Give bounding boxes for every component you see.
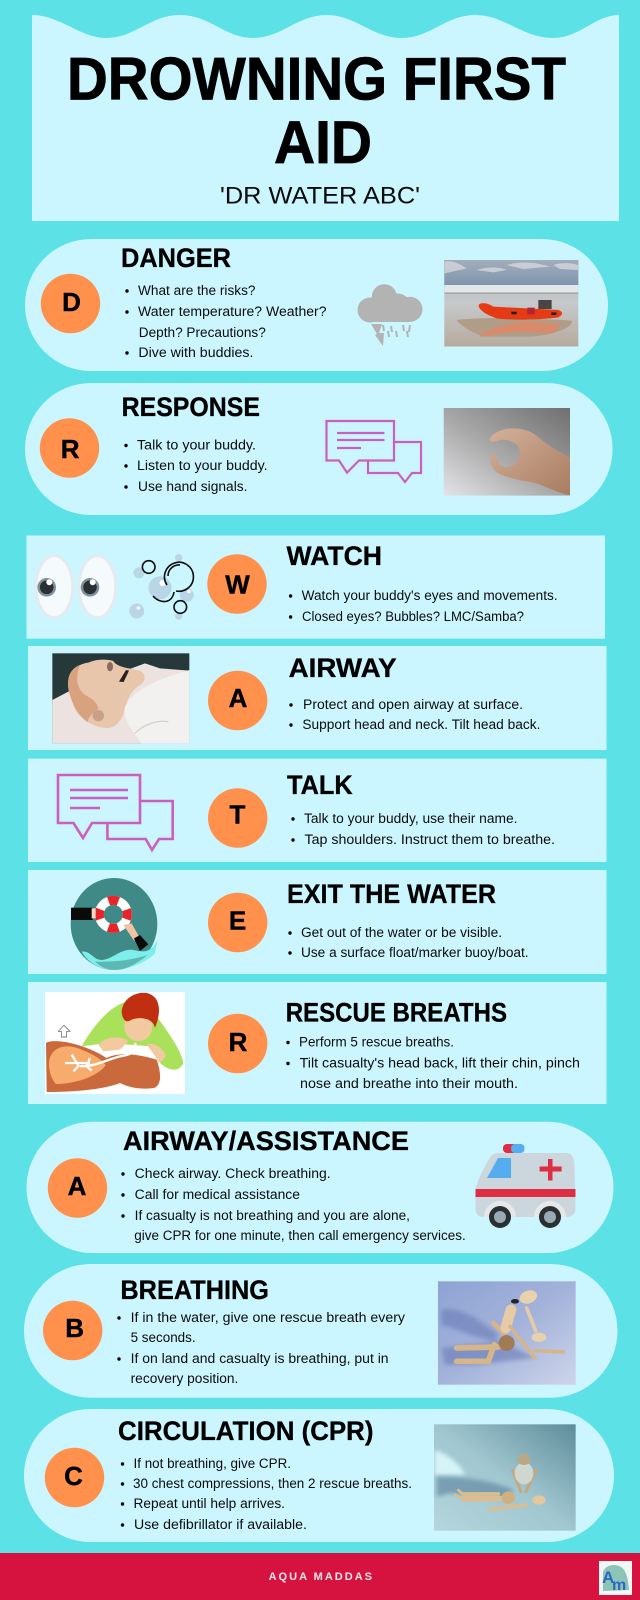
heading rescue breaths: RESCUE BREATHS [286, 998, 507, 1028]
watch bullet list [289, 588, 558, 624]
photo: wooden mannequins recovery position [438, 1281, 576, 1385]
circulation bullet list: 30 chest compressions, then 2 rescue breaths. [133, 1476, 412, 1491]
danger bullet list: What are the risks? [138, 283, 256, 298]
icon: life ring rescue [71, 878, 157, 970]
badge B: B [65, 1313, 84, 1343]
badge A: A [68, 1171, 87, 1201]
airway assistance bullet list [121, 1166, 466, 1243]
photo: red rescue boat on beach [444, 260, 578, 346]
badge C [45, 1448, 104, 1507]
rescue breaths bullet list: Tilt casualty's head back, lift their chin, pinch [300, 1056, 580, 1070]
title [67, 46, 566, 176]
footer band [0, 1553, 640, 1600]
breathing bullet list: If in the water, give one rescue breath every [131, 1310, 405, 1325]
exit bullet list: Use a surface float/marker buoy/boat. [301, 945, 529, 960]
airway assistance bullet list: If casualty is not breathing and you are alone, [135, 1208, 410, 1223]
photo: wooden mannequins performing CPR [434, 1424, 576, 1531]
badge W [207, 554, 267, 614]
breathing bullet list: recovery position. [131, 1371, 238, 1386]
panel: talk [28, 759, 606, 862]
heading exit the water: EXIT THE WATER [287, 879, 496, 909]
panel: danger [25, 239, 608, 371]
danger bullet list: Dive with buddies. [138, 345, 253, 360]
badge A [48, 1158, 107, 1218]
breathing bullet list: If on land and casualty is breathing, put in [131, 1351, 389, 1366]
panel: breathing [24, 1264, 618, 1398]
heading danger: DANGER [121, 243, 231, 273]
title: AID [274, 109, 372, 176]
photo: hand signal [444, 408, 570, 496]
badge T: T [230, 800, 246, 830]
badge E: E [229, 906, 246, 936]
badge D [41, 274, 100, 333]
logo: Aqua Maddas [599, 1561, 632, 1595]
panel: airway and assistance [26, 1122, 614, 1253]
badge A: A [229, 683, 248, 713]
watch bullet list: Closed eyes? Bubbles? LMC/Samba? [302, 609, 524, 624]
badge T [208, 788, 267, 848]
illustration: mouth to mouth rescue breath [45, 992, 185, 1094]
panel: circulation [24, 1409, 614, 1542]
badge R [208, 1014, 267, 1073]
rescue breaths bullet list [286, 1034, 580, 1091]
badge D: D [62, 287, 81, 317]
response bullet list: Talk to your buddy. [137, 438, 256, 452]
talk bullet list: Tap shoulders. Instruct them to breathe. [304, 832, 555, 847]
circulation bullet list [121, 1456, 412, 1532]
icon: bubbles [129, 554, 194, 620]
heading airway assistance: AIRWAY/ASSISTANCE [123, 1126, 409, 1156]
heading airway: AIRWAY [289, 653, 397, 683]
airway assistance bullet list: Check airway. Check breathing. [135, 1166, 331, 1181]
icon: storm cloud [358, 284, 422, 346]
panel: exit the water [28, 870, 606, 974]
icon: ambulance [476, 1144, 576, 1228]
airway assistance bullet list: Call for medical assistance [135, 1187, 300, 1202]
danger bullet list: Depth? Precautions? [139, 325, 266, 340]
danger bullet list: Water temperature? Weather? [138, 304, 326, 319]
heading talk: TALK [287, 770, 353, 800]
badge C: C [64, 1461, 83, 1491]
talk bullet list: Talk to your buddy, use their name. [304, 811, 518, 826]
exit bullet list [288, 925, 529, 960]
badge E [208, 893, 267, 952]
panel: airway [28, 646, 606, 750]
circulation bullet list: If not breathing, give CPR. [134, 1456, 291, 1471]
heading watch: WATCH [286, 541, 382, 571]
rescue breaths bullet list: Perform 5 rescue breaths. [299, 1034, 454, 1050]
danger bullet list [125, 283, 326, 360]
icon: chat bubbles [58, 775, 173, 850]
panel: watch [26, 536, 605, 639]
photo: manikin head tilted back [52, 653, 189, 743]
airway bullet list: Protect and open airway at surface. [303, 697, 523, 712]
panel: response [25, 383, 613, 515]
response bullet list: Listen to your buddy. [137, 458, 268, 473]
subtitle: 'DR WATER ABC' [220, 182, 420, 210]
heading response: RESPONSE [122, 392, 260, 422]
response bullet list [124, 438, 268, 494]
watch bullet list: Watch your buddy's eyes and movements. [302, 588, 558, 603]
airway bullet list: Support head and neck. Tilt head back. [302, 717, 540, 732]
badge R: R [61, 434, 80, 464]
breathing bullet list [117, 1310, 405, 1386]
heading breathing: BREATHING [120, 1275, 269, 1305]
talk bullet list [291, 811, 555, 847]
exit bullet list: Get out of the water or be visible. [301, 925, 502, 940]
badge A [208, 671, 267, 730]
airway bullet list [289, 697, 540, 732]
logo: Aqua Maddas: m [612, 1577, 626, 1594]
breathing bullet list: 5 seconds. [131, 1330, 196, 1345]
icon: chat bubbles [326, 421, 421, 482]
badge R [40, 418, 99, 478]
footer text: AQUA MADDAS [269, 1571, 372, 1583]
title panel [32, 15, 619, 221]
title: DROWNING FIRST [67, 46, 566, 112]
icon: eyes [34, 554, 117, 619]
response bullet list: Use hand signals. [138, 479, 248, 494]
logo: Aqua Maddas: A [602, 1568, 614, 1587]
circulation bullet list: Use defibrillator if available. [134, 1517, 307, 1532]
badge R: R [229, 1027, 248, 1057]
heading circulation: CIRCULATION (CPR) [118, 1416, 374, 1446]
circulation bullet list: Repeat until help arrives. [134, 1496, 285, 1511]
rescue breaths bullet list: nose and breathe into their mouth. [300, 1076, 518, 1091]
badge B [43, 1301, 102, 1360]
badge W: W [225, 570, 250, 600]
panel: rescue breaths [28, 982, 606, 1104]
airway assistance bullet list: give CPR for one minute, then call emergency services. [134, 1228, 466, 1243]
